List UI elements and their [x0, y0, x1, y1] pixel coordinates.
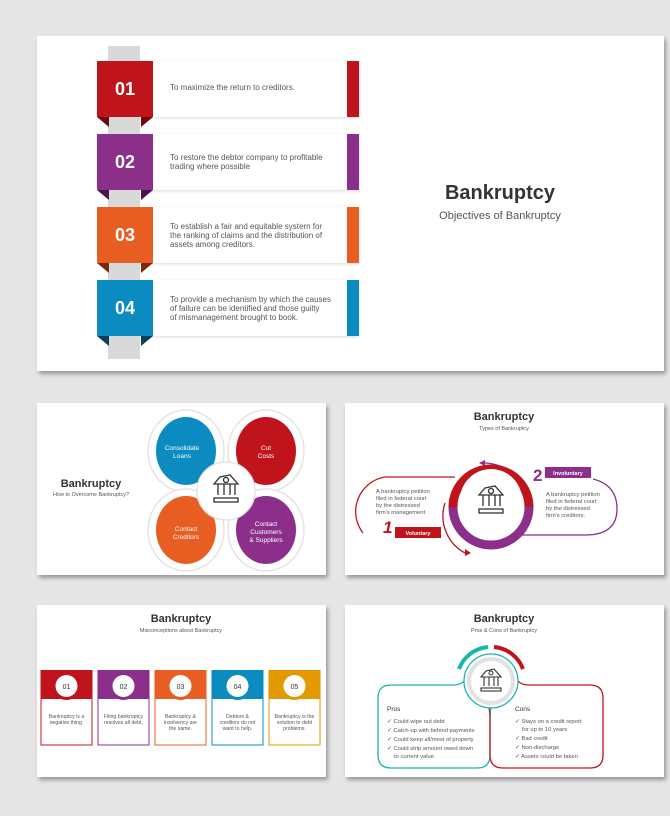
row 02: 02	[115, 152, 135, 172]
slide: objectives	[37, 36, 664, 371]
row 01: 01	[115, 79, 135, 99]
pros box	[378, 677, 492, 768]
row 04: of mismanagement brought to book.	[170, 313, 298, 322]
title: Misconceptions about Bankruptcy	[140, 628, 222, 634]
slide: types	[345, 403, 664, 575]
pros cons diagram: ✓ Bad credit	[515, 736, 548, 742]
types diagram: 2	[533, 466, 542, 485]
types diagram: A bankruptcy petition	[546, 492, 600, 498]
row 03	[97, 207, 360, 273]
four circles diagram: & Suppliers	[249, 537, 283, 544]
slide: pros and cons	[345, 605, 664, 777]
types diagram: filed in federal court	[376, 496, 427, 502]
title: Bankruptcy	[61, 478, 121, 490]
pros cons diagram: ✓ Non-discharge	[515, 745, 559, 751]
row 02: To restore the debtor company to profitable	[170, 153, 323, 162]
title: Bankruptcy	[474, 613, 534, 625]
misconception cards: problems.	[283, 726, 306, 732]
row 01	[97, 61, 360, 127]
types diagram: Voluntary	[406, 531, 431, 537]
title	[439, 182, 561, 222]
title: Bankruptcy	[474, 411, 534, 423]
types diagram: firm's management	[376, 510, 425, 516]
row 03: 03	[115, 225, 135, 245]
misconception cards: Bankruptcy &	[165, 714, 196, 720]
row 03: assets among creditors.	[170, 240, 255, 249]
pros cons diagram: ✓ Could keep all/most of property	[387, 737, 474, 743]
four circles diagram: Consolidate	[165, 445, 200, 452]
four circles diagram: Cut	[261, 445, 271, 452]
four circles diagram: Creditors	[173, 534, 200, 541]
pros cons diagram: ✓ Could wipe out debt	[387, 719, 445, 725]
pros cons diagram: ✓ Assets could be taken	[515, 754, 578, 760]
four circles diagram	[147, 409, 305, 572]
pros cons diagram	[377, 645, 604, 769]
four circles diagram: Costs	[258, 453, 275, 460]
four circles diagram: Contact	[175, 526, 197, 533]
row 04: 04	[115, 298, 135, 318]
misconception cards: 05	[291, 684, 298, 691]
row 03: the ranking of claims and the distribution of	[170, 231, 322, 240]
misconception cards: want to help.	[223, 726, 252, 732]
row 01: To maximize the return to creditors.	[170, 83, 295, 92]
misconception cards: insolvency are	[164, 720, 197, 726]
title	[474, 411, 534, 432]
pros cons diagram: ✓ Stays on a credit report	[515, 719, 582, 725]
title: Bankruptcy	[445, 182, 555, 204]
row 02	[97, 134, 360, 200]
row 04: of failure can be identified and those guilty	[170, 304, 319, 313]
row 04: To provide a mechanism by which the causes	[170, 295, 331, 304]
misconception cards	[40, 670, 320, 746]
misconception cards: 04	[234, 684, 241, 691]
pros cons diagram: Cons	[515, 706, 531, 713]
four circles diagram: Loans	[173, 453, 192, 460]
misconception cards: creditors do not	[220, 720, 256, 726]
misconception cards: solution to debt	[277, 720, 313, 726]
four circles diagram: Contact	[255, 521, 277, 528]
title: Bankruptcy	[151, 613, 211, 625]
misconception cards: negative thing.	[50, 720, 83, 726]
title	[471, 613, 537, 634]
pros cons diagram: to current value	[394, 754, 434, 760]
misconception cards: 02	[120, 684, 127, 691]
title: Pros & Cons of Bankruptcy	[471, 628, 537, 634]
misconception cards: Bankruptcy is a	[49, 714, 84, 720]
types diagram: filed in federal court	[546, 499, 597, 505]
pros cons diagram: for up to 10 years	[522, 727, 567, 733]
row 04	[97, 280, 360, 346]
row 03: To establish a fair and equitable systern for	[170, 222, 322, 231]
pros cons diagram: ✓ Could strip amount owed down	[387, 746, 473, 752]
gray vertical strip	[108, 46, 140, 359]
title	[53, 478, 129, 498]
title: How to Overcome Bankruptcy?	[53, 492, 129, 498]
icon: bank	[214, 475, 238, 502]
cons box	[488, 677, 603, 768]
pros cons diagram: Pros	[387, 706, 401, 713]
types diagram: by the distressed	[546, 506, 590, 512]
misconception cards: Bankruptcy is the	[275, 714, 315, 720]
types diagram: Involuntary	[553, 471, 584, 477]
misconception cards: 01	[63, 684, 70, 691]
misconception cards: resolves all debt.	[104, 720, 143, 726]
types diagram: 1	[383, 518, 392, 537]
types diagram: A bankruptcy petition	[376, 489, 430, 495]
row 02: trading where possible	[170, 162, 250, 171]
types diagram: by the distressed	[376, 503, 420, 509]
title: Types of Bankruptcy	[479, 426, 529, 432]
types diagram	[355, 460, 618, 556]
title: Objectives of Bankruptcy	[439, 210, 561, 222]
title	[140, 613, 222, 634]
four circles diagram: Customers	[250, 529, 282, 536]
slide: misconceptions	[37, 605, 326, 777]
misconception cards: Debtors &	[226, 714, 250, 720]
slide: how to overcome	[37, 403, 326, 575]
misconception cards: the same.	[169, 726, 192, 732]
types diagram: firm's creditors.	[546, 513, 586, 519]
misconception cards: Filing bankruptcy	[104, 714, 144, 720]
misconception cards: 03	[177, 684, 184, 691]
pros cons diagram: ✓ Catch-up with behind payments	[387, 728, 475, 734]
